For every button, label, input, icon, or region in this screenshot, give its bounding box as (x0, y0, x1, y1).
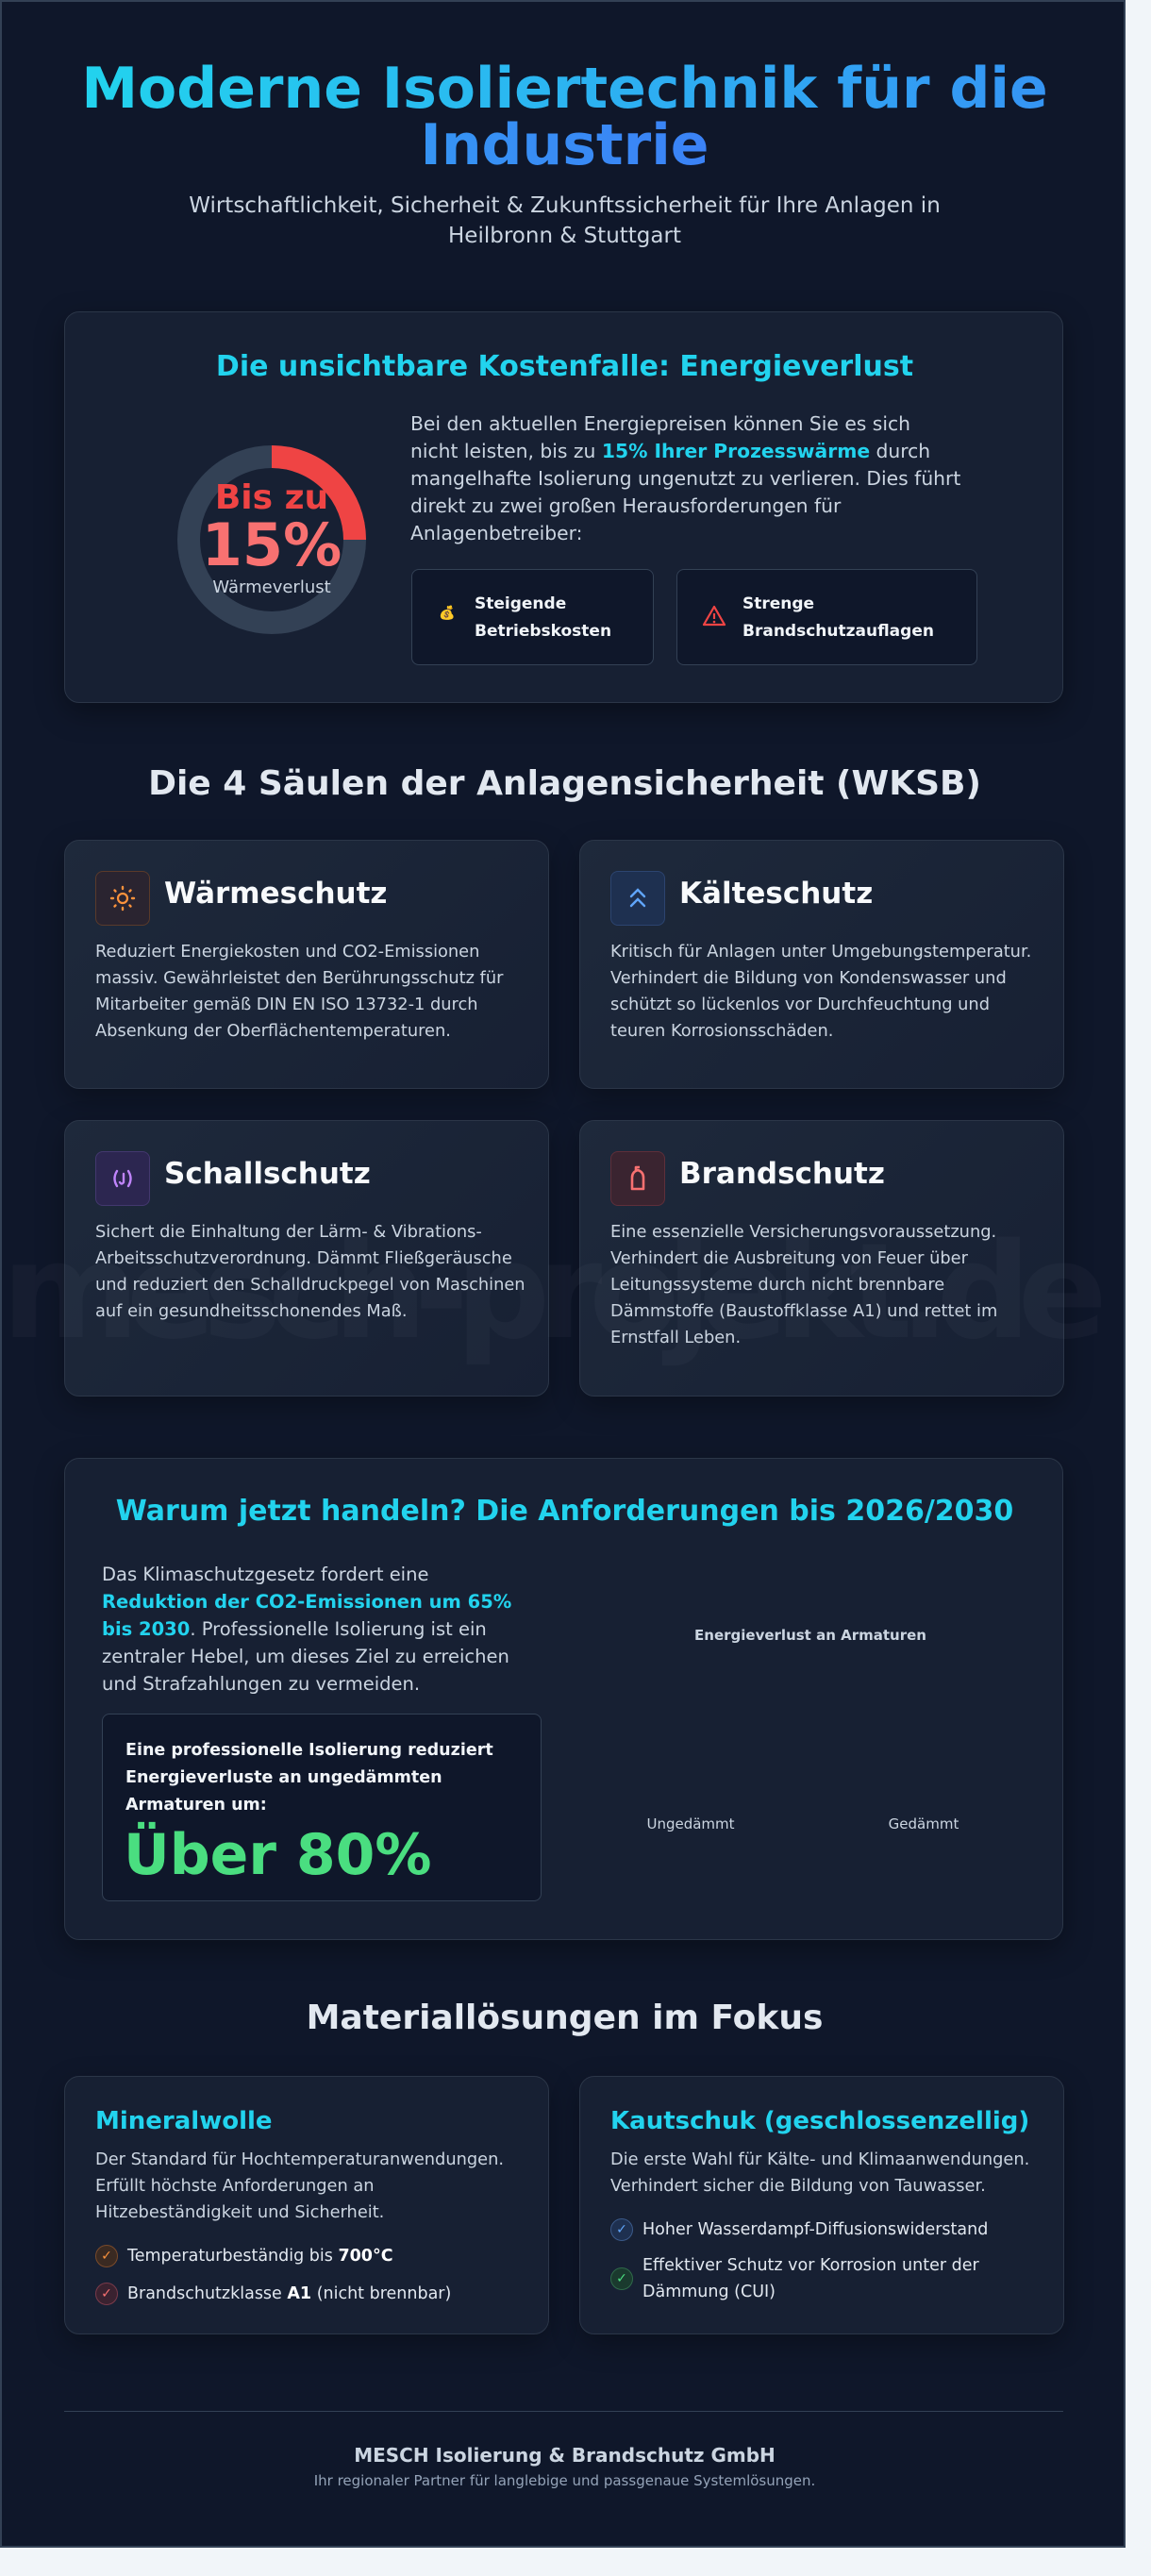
box: fire regulations: Brandschutzauflagen (742, 622, 934, 641)
card: Brandschutz: Brandschutz (679, 1157, 885, 1191)
list: mineral wool features: ✓ (101, 2286, 112, 2301)
callout: 80%: Eine professionelle Isolierung reduziert Energieverluste an ungedämmten Armaturen um: (125, 1741, 493, 1815)
list: rubber features: ✓ (616, 2271, 627, 2286)
donut chart: Wärmeverlust (212, 577, 331, 597)
card: Kälteschutz: Kritisch für Anlagen unter Umgebungstemperatur. Verhindert die Bildung von Kondenswasser und schützt so lückenlos vor Durchfeuchtung und teuren Korrosionsschäden. (610, 942, 1031, 1041)
list: mineral wool features: Brandschutzklasse A1 (nicht brennbar) (127, 2284, 451, 2303)
icon: fire extinguisher (610, 1151, 665, 1206)
callout: 80%: Über 80% (124, 1822, 431, 1888)
icon: sound (95, 1151, 150, 1206)
title: Moderne Isoliertechnik für die (81, 56, 1048, 122)
chart: energy loss at fittings (646, 1627, 959, 1832)
list: mineral wool features: ✓ (101, 2249, 112, 2264)
donut chart (177, 445, 366, 634)
callout: 80% (102, 1714, 542, 1901)
card: Kälteschutz: Kälteschutz (679, 877, 873, 911)
chart: energy loss at fittings: Ungedämmt (646, 1815, 735, 1832)
card: Kälteschutz (579, 840, 1064, 1089)
icon: coin: 💰 (439, 606, 455, 621)
footer: Ihr regionaler Partner für langlebige und passgenaue Systemlösungen. (314, 2472, 815, 2489)
footer (314, 2444, 815, 2489)
heading: energy loss: Die unsichtbare Kostenfalle: Energieverlust (216, 350, 913, 383)
box: operating costs: Betriebskosten (475, 622, 611, 641)
icon: warning (702, 606, 726, 627)
chart: energy loss at fittings: Gedämmt (889, 1815, 959, 1832)
chart: energy loss at fittings: Energieverlust an Armaturen (694, 1627, 926, 1644)
panel: energy loss (64, 311, 1063, 703)
footer: MESCH Isolierung & Brandschutz GmbH (354, 2444, 776, 2467)
card: Wärmeschutz: Wärmeschutz (164, 877, 387, 911)
panel: why act now (64, 1458, 1063, 1940)
box: fire regulations (676, 569, 977, 665)
card: Wärmeschutz: Reduziert Energiekosten und CO2-Emissionen massiv. Gewährleistet den Berührungsschutz für Mitarbeiter gemäß DIN EN ISO 13732-1 durch Absenkung der Oberflächentemperaturen. (95, 942, 503, 1041)
title (81, 56, 1048, 178)
card: Brandschutz: Eine essenzielle Versicherungsvoraussetzung. Verhindert die Ausbreitung von Feuer über Leitungssysteme durch nicht brennbare Dämmstoffe (Baustoffklasse A1) und rettet im Ernstfall Leben. (610, 1222, 997, 1347)
donut chart: 15% (202, 510, 342, 579)
list: rubber features: Hoher Wasserdampf-Diffusionswiderstand (642, 2220, 988, 2239)
text: energy paragraph: nicht leisten, bis zu 15% Ihrer Prozesswärme durch mangelhafte Isolierung ungenutzt zu verlieren. Dies führt direkt zu zwei großen Herausforderungen für Anlagenbetreiber: (410, 440, 960, 544)
card: Kautschuk: Kautschuk (geschlossenzellig) (610, 2107, 1029, 2135)
list: rubber features: Effektiver Schutz vor Korrosion unter der Dämmung (CUI) (642, 2256, 979, 2301)
donut chart: Bis zu (215, 478, 328, 517)
box: operating costs: Steigende (475, 594, 566, 613)
list: rubber features (610, 2218, 988, 2301)
list: mineral wool features: Temperaturbeständig bis 700°C (127, 2247, 393, 2266)
card: Schallschutz: Schallschutz (164, 1157, 371, 1191)
text: climate law: Das Klimaschutzgesetz fordert eine Reduktion der CO2-Emissionen um 65% bis 2030. Professionelle Isolierung ist ein zentraler Hebel, um dieses Ziel zu erreichen und Strafzahlungen zu vermeiden. (102, 1564, 511, 1695)
heading: materials: Materiallösungen im Fokus (307, 1999, 823, 2037)
list: mineral wool features (95, 2245, 451, 2305)
card: Schallschutz: Sichert die Einhaltung der Lärm- & Vibrations-Arbeitsschutzverordnung. Dämmt Fließgeräusche und reduziert den Schalldruckpegel von Maschinen auf ein gesundheitsschonendes Maß. (95, 1222, 525, 1321)
card: Mineralwolle: Der Standard für Hochtemperaturanwendungen. Erfüllt höchste Anforderungen an Hitzebeständigkeit und Sicherheit. (95, 2149, 504, 2222)
list: rubber features: ✓ (616, 2222, 627, 2237)
card: Mineralwolle (64, 2076, 549, 2334)
icon: sun (95, 871, 150, 926)
box: operating costs (411, 569, 654, 665)
card: Kautschuk (579, 2076, 1064, 2334)
card: Schallschutz (64, 1120, 549, 1397)
box: fire regulations: Strenge (742, 594, 814, 613)
card: Mineralwolle: Mineralwolle (95, 2107, 273, 2135)
text: energy paragraph: Bei den aktuellen Energiepreisen können Sie es sich (410, 412, 910, 435)
watermark: mesch-projekt.de (2, 1215, 1094, 1369)
card: Wärmeschutz (64, 840, 549, 1089)
card: Kautschuk: Die erste Wahl für Kälte- und Klimaanwendungen. Verhindert sicher die Bildung von Tauwasser. (610, 2149, 1029, 2196)
icon: chevrons (610, 871, 665, 926)
card: Brandschutz (579, 1120, 1064, 1397)
title: Industrie (421, 112, 709, 178)
heading: 4 pillars: Die 4 Säulen der Anlagensicherheit (WKSB) (148, 764, 981, 803)
heading: requirements: Warum jetzt handeln? Die Anforderungen bis 2026/2030 (116, 1495, 1013, 1528)
subtitle: Wirtschaftlichkeit, Sicherheit & Zukunftssicherheit für Ihre Anlagen in Heilbronn & Stuttgart (189, 193, 941, 248)
